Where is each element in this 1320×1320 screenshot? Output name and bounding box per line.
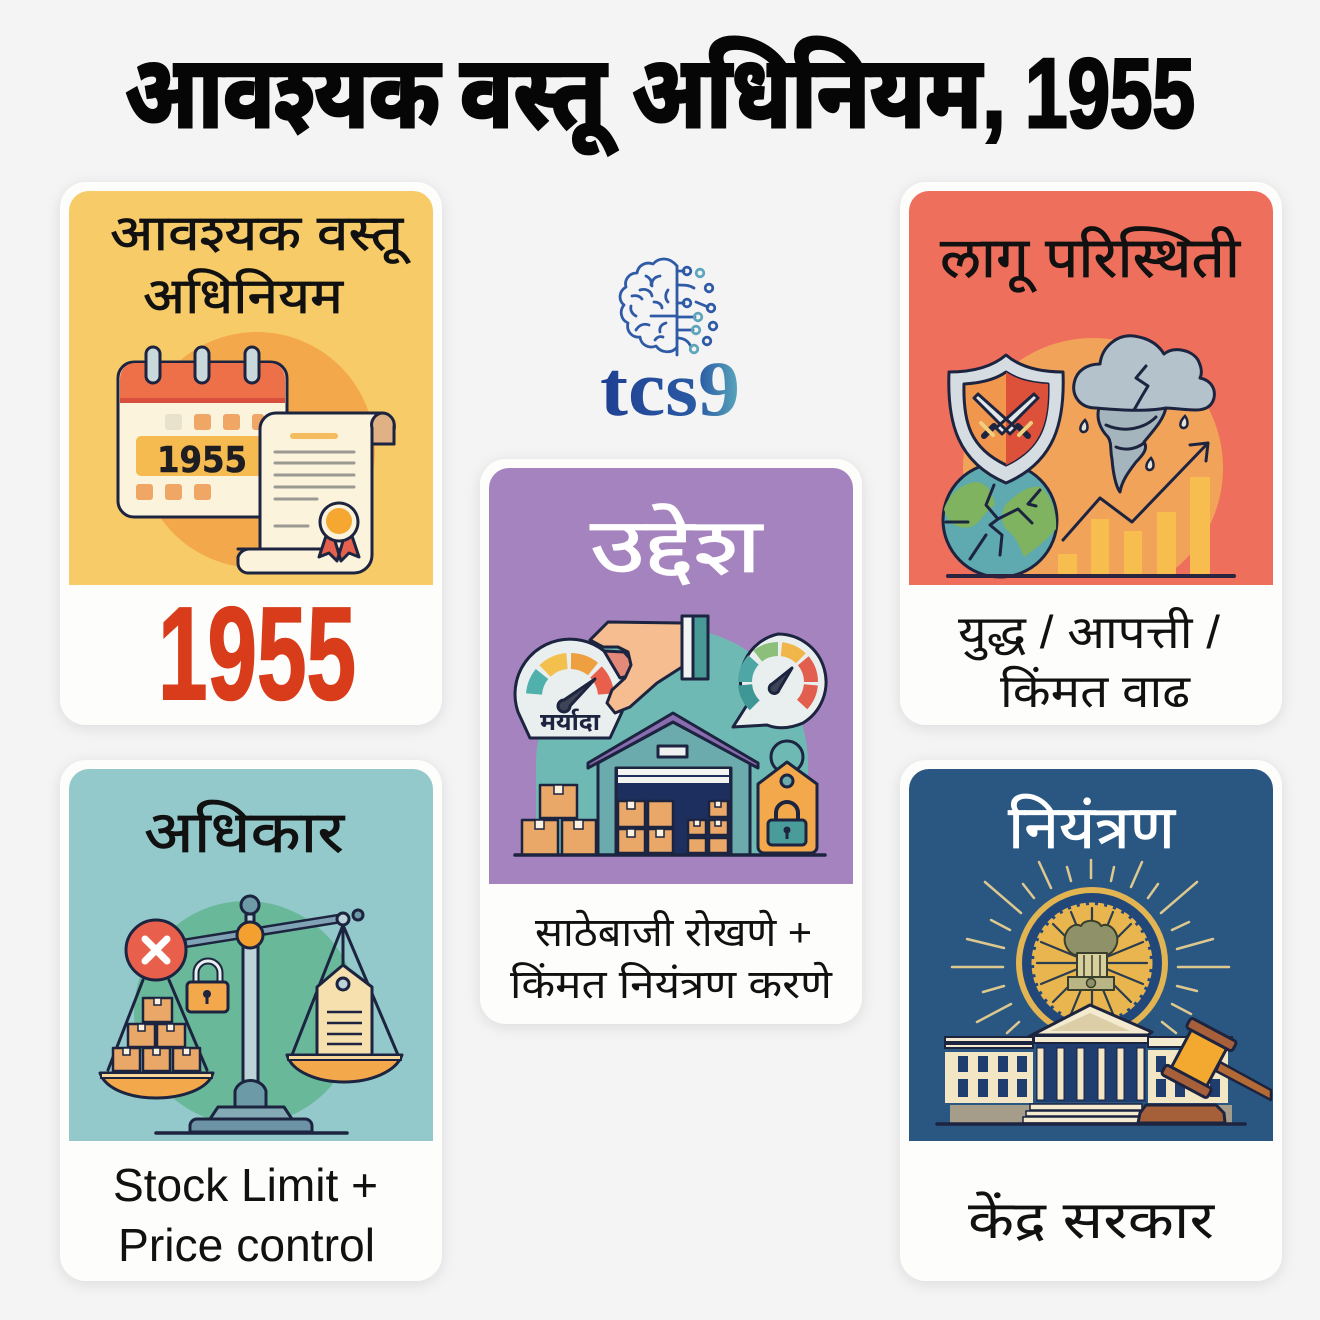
icon: calendar and scroll [118,332,394,573]
icon: gauges, hand and warehouse: मर्यादा [540,708,601,736]
heading: लागू परिस्थिती [940,226,1242,293]
heading: नियंत्रण [1008,794,1177,861]
icon: shield, globe, storm and rising prices [943,336,1234,598]
icon: gavel head [1161,1018,1237,1098]
caption [958,606,1220,717]
panel: powers [60,760,442,1281]
caption: Stock Limit + [113,1159,378,1211]
caption: किंमत नियंत्रण करणे [510,962,833,1007]
title: अधिनियम, [632,37,1006,149]
caption: युद्ध / आपत्ती / [958,606,1220,662]
caption [113,1159,378,1271]
caption: किंमत वाढ [1000,665,1191,717]
caption: केंद्र सरकार [968,1191,1216,1250]
caption [510,910,833,1007]
title: वस्तू [460,37,618,156]
panel: control [900,760,1282,1281]
heading: act name: अधिनियम [143,268,344,324]
icon: calendar and scroll: 1955 [157,440,247,481]
year 1955: 1955 [158,580,356,727]
panel: act card [60,182,442,727]
caption: Price control [118,1219,375,1271]
icon: balance scale [100,896,402,1133]
logo: tcs9 brain [600,259,740,432]
title: आवश्यक [125,37,442,149]
logo wordmark: tcs9 [600,345,740,432]
panel: applicable circumstances [900,182,1282,725]
caption: साठेबाजी रोखणे + [535,910,812,955]
heading: act name [110,205,411,324]
title [125,37,1195,156]
title: 1955 [1025,38,1195,148]
icon: emblem, parliament and gavel [937,860,1271,1124]
icon: gauges, hand and warehouse [515,616,826,855]
heading: उद्देश [590,504,765,589]
panel: objective [480,459,862,1024]
heading: act name: आवश्यक वस्तू [110,205,411,265]
heading: अधिकार [144,800,345,865]
